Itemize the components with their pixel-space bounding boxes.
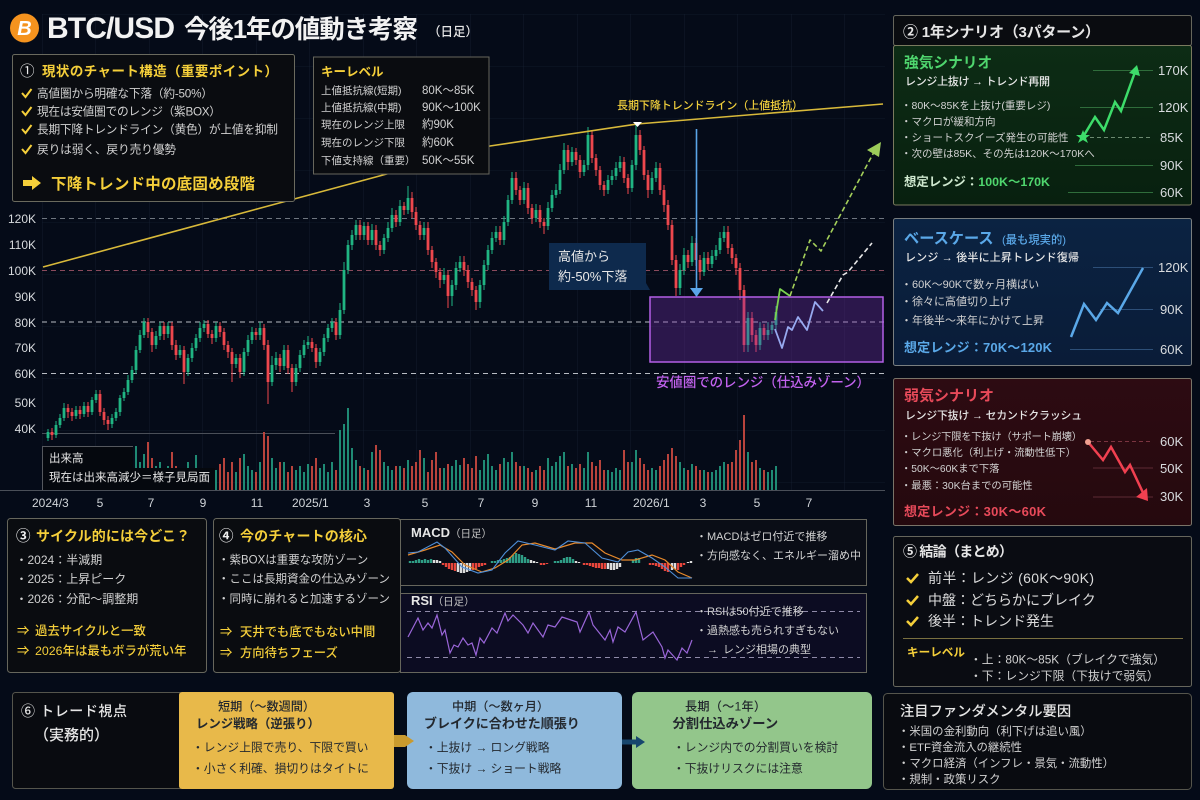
callout: drop [549,243,650,290]
x axis labels: 2025/1 [292,496,329,510]
volume note: 現在は出来高減少＝様子見局面 [49,470,210,484]
bullets: ・最悪：30K台までの可能性 [901,479,1033,492]
arrow: short to mid [394,735,414,747]
conclusion: 下降トレンド中の底固め段階 [51,175,255,193]
panel: fundamentals: ・規制・政策リスク [898,772,1001,786]
levels table: 上値抵抗線(短期) [321,84,402,97]
title [10,12,478,45]
panel 2 header: ② 1年シナリオ（3パターン） [903,23,1100,41]
x axis labels: 3 [700,496,707,510]
y axis labels: 70K [15,341,36,355]
bullets: ・マクロ悪化（利上げ・流動性低下） [901,446,1076,459]
y axis labels: 90K [15,290,36,304]
levels table [321,84,481,167]
x axis labels: 7 [148,496,155,510]
heading: MACD（日足） [411,525,492,540]
candlesticks [48,124,776,441]
levels table: 80K〜85K [422,85,475,97]
bullets: ・50K〜60Kまで下落 [901,463,1000,475]
check list: 長期下降トレンドライン（黄色）が上値を抑制 [37,122,278,136]
card: mid term: ・下抜け → ショート戦略 [425,762,562,776]
callout: drop: 高値から [558,249,610,264]
heading: サイクル的には今どこ？ [36,528,190,544]
levels table: 現在のレンジ上限 [321,119,405,131]
y axis labels: 40K [15,422,36,436]
check list: 現在は安値圏でのレンジ（紫BOX） [37,104,221,118]
card: long term: ・下抜けリスクには注意 [673,762,803,776]
card: mid term: ブレイクに合わせた順張り [424,716,580,731]
trend line [43,98,883,267]
card: short term [179,692,394,789]
card: short term: ・レンジ上限で売り、下限で買い [192,740,368,754]
y axis labels: 100K [8,264,36,278]
heading: (最も現実的) [1002,232,1066,246]
mini chart: 50K [1160,461,1183,476]
rsi notes: ・過熱感も売られすぎもない [696,623,839,637]
x axis labels: 2026/1 [633,496,670,510]
heading: 弱気シナリオ [904,386,994,404]
levels table: 約90K [422,117,454,131]
mini chart: 120K [1158,100,1189,115]
takeaways: ⇒ [220,646,232,660]
mini chart: 90K [1160,158,1183,173]
card: mid term: 中期（〜数ヶ月） [452,698,549,714]
panel 6: trade view: （実務的） [34,727,109,744]
x axis labels: 7 [806,496,813,510]
takeaways [220,624,375,660]
y axis labels: 120K [8,212,36,226]
range: 想定レンジ：70K〜120K [904,340,1053,355]
takeaways [17,623,186,658]
panel: bearish scenario [894,378,1192,526]
heading: RSI（日足） [411,593,475,608]
price chart [0,124,885,510]
panel 5: conclusion [894,536,1192,686]
x axis labels: 5 [97,496,104,510]
rows: ・2025：上昇ピーク [16,572,126,586]
panel: key levels [314,57,489,174]
macd notes [696,529,861,562]
mini chart: 90K [1160,302,1183,317]
x axis labels: 11 [585,496,598,510]
x axis labels: 7 [478,496,485,510]
subheading: レンジ → 後半に上昇トレンド復帰 [905,250,1079,264]
bullets: ・60K〜90Kで数ヶ月横ばい [901,277,1039,291]
heading: ① [20,63,34,80]
heading: キーレベル [321,65,384,79]
bullets: ・年後半〜来年にかけて上昇 [901,313,1044,327]
check list: 戻りは弱く、戻り売り優勢 [37,142,176,156]
heading: 今のチャートの核心 [240,528,367,544]
takeaways: 過去サイクルと一致 [35,623,147,638]
arrow: mid to long [622,736,645,748]
mini chart: 170K [1158,63,1189,78]
heading: ③ [16,528,31,545]
title text: BTC/USD [47,12,175,45]
y axis labels: 80K [15,316,36,330]
takeaways: 方向待ちフェーズ [240,645,338,660]
card: long term: ・レンジ内での分割買いを検討 [673,740,838,754]
rows: ・2026：分配〜調整期 [16,592,138,606]
bullets: ・80K〜85Kを上抜け(重要レジ) [901,99,1050,112]
card: long term: 長期（〜1年） [685,700,766,714]
card: short term: 短期（〜数週間） [218,698,315,714]
takeaways: 2026年は最もボラが荒い年 [35,643,186,658]
panel: fundamentals: 注目ファンダメンタル要因 [900,702,1071,720]
panel: bullish scenario [894,46,1192,205]
icon: bitcoin: B [17,18,32,40]
checks: 中盤：どちらかにブレイク [928,592,1096,608]
peak marker [633,122,642,127]
heading: 現状のチャート構造（重要ポイント） [42,63,278,79]
panel 3: cycle [8,518,206,672]
heading: ⑤ 結論（まとめ） [903,544,1013,560]
card: mid term [407,692,622,789]
mini chart [1070,260,1189,357]
panel 6: trade view [12,692,182,788]
mini chart: 60K [1160,434,1183,449]
card: short term: ・小さく利確、損切りはタイトに [192,762,369,776]
mini chart: 60K [1160,185,1183,200]
y axis labels [8,212,36,436]
panel 4: core [214,518,400,672]
y axis labels: 50K [15,396,36,410]
x axis labels: 5 [422,496,429,510]
card: long term: 分割仕込みゾーン [672,715,778,731]
panel 1: chart structure [12,54,294,202]
levels table: 上値抵抗線(中期) [321,101,402,114]
bullets: ・次の壁は85K、その先は120K〜170Kへ [901,147,1095,160]
rows: ・ここは長期資金の仕込みゾーン [218,572,390,586]
check list [22,86,278,156]
panel 5: conclusion: ・上：80K〜85K（ブレイクで強気） [970,652,1165,666]
takeaways: ⇒ [17,644,29,658]
panel 2 header [894,16,1192,46]
x axis labels: 9 [532,496,539,510]
panel: RSI [400,593,866,672]
volume note [42,446,215,490]
takeaways: 天井でも底でもない中間 [240,624,375,639]
rsi chart [408,612,692,660]
panel 5: conclusion: ・下：レンジ下限（下抜けで弱気） [970,669,1159,683]
levels table: 50K〜55K [422,155,475,167]
macd notes: ・MACDはゼロ付近で推移 [696,529,827,543]
bullets [901,277,1044,327]
macd notes: ・方向感なく、エネルギー溜め中 [696,548,861,562]
mini chart [1068,63,1189,200]
levels table: 現在のレンジ下限 [321,137,405,149]
panel: MACD [400,520,866,586]
arrow: drop from high [690,129,703,297]
panel: base case [894,218,1192,366]
rsi notes [696,604,839,656]
check list: 高値圏から明確な下落（約-50%） [37,86,213,100]
title suffix: （日足） [428,25,478,39]
macd chart [408,541,692,578]
takeaways: ⇒ [17,624,29,638]
range: 想定レンジ：30K〜60K [904,504,1047,519]
scenario projections [775,142,881,348]
rsi notes: レンジ相場の典型 [723,642,811,656]
callout: drop: 約-50%下落 [558,269,627,284]
rows [16,552,138,606]
heading: 強気シナリオ [904,54,992,72]
bullets: ・レンジ下限を下抜け（サポート崩壊） [901,430,1082,443]
card: short term: レンジ戦略（逆張り） [196,716,320,731]
volume note: 出来高 [49,452,84,465]
mini chart [1085,434,1183,504]
heading: ベースケース [904,230,994,248]
bullets: ・マクロが緩和方向 [901,115,996,128]
x axis labels: 9 [200,496,207,510]
x axis labels: 5 [754,496,761,510]
bullets [901,99,1095,160]
takeaways: ⇒ [220,625,232,639]
mini chart: 120K [1158,260,1189,275]
subheading: レンジ上抜け → トレンド再開 [905,74,1050,88]
bullets [901,430,1082,492]
panel: fundamentals [884,694,1192,790]
levels table: 90K〜100K [422,102,481,114]
heading: ④ [219,528,234,545]
card: mid term: ・上抜け → ロング戦略 [425,740,550,754]
panel: fundamentals: ・ETF資金流入の継続性 [898,740,1022,754]
icon: bitcoin [10,14,39,42]
range label: 安値圏でのレンジ（仕込みゾーン） [656,375,870,390]
range: 想定レンジ：100K〜170K [904,174,1050,189]
y axis labels: 110K [9,238,36,252]
panel 6: trade view: ⑥ トレード視点 [21,703,127,719]
rsi notes: → [707,644,718,656]
key levels: キーレベル [907,646,965,659]
x axis labels: 3 [364,496,371,510]
card: long term [632,692,872,789]
y axis labels: 60K [15,367,36,381]
volume bars [136,408,776,490]
checks [907,570,1096,629]
mini chart: 30K [1160,489,1183,504]
bullets: ・ショートスクイーズ発生の可能性 [901,131,1068,144]
rows: ・同時に崩れると加速するゾーン [218,592,390,606]
bullets: ・徐々に高値切り上げ [901,294,1011,308]
subheading: レンジ下抜け → セカンドクラッシュ [905,408,1082,422]
checks: 後半：トレンド発生 [928,613,1054,629]
trend line label: 長期下降トレンドライン（上値抵抗） [617,98,803,112]
levels table: 下値支持線（重要） [321,154,416,167]
range box [650,297,883,390]
x axis labels: 2024/3 [32,496,69,510]
levels table: 約60K [422,135,454,149]
checks: 前半：レンジ (60K〜90K) [928,570,1094,586]
mini chart: 60K [1160,342,1183,357]
rsi notes: ・RSIは50付近で推移 [696,604,804,618]
rows: ・紫BOXは重要な攻防ゾーン [218,552,368,566]
mini chart: 85K [1160,130,1183,145]
rows [218,552,390,606]
panel: fundamentals: ・マクロ経済（インフレ・景気・流動性） [898,756,1114,770]
rows: ・2024：半減期 [16,552,102,567]
title text: 今後1年の値動き考察 [184,16,418,44]
x axis labels: 11 [251,496,264,510]
x axis labels [32,496,813,510]
panel: fundamentals: ・米国の金利動向（利下げは追い風） [898,724,1092,738]
